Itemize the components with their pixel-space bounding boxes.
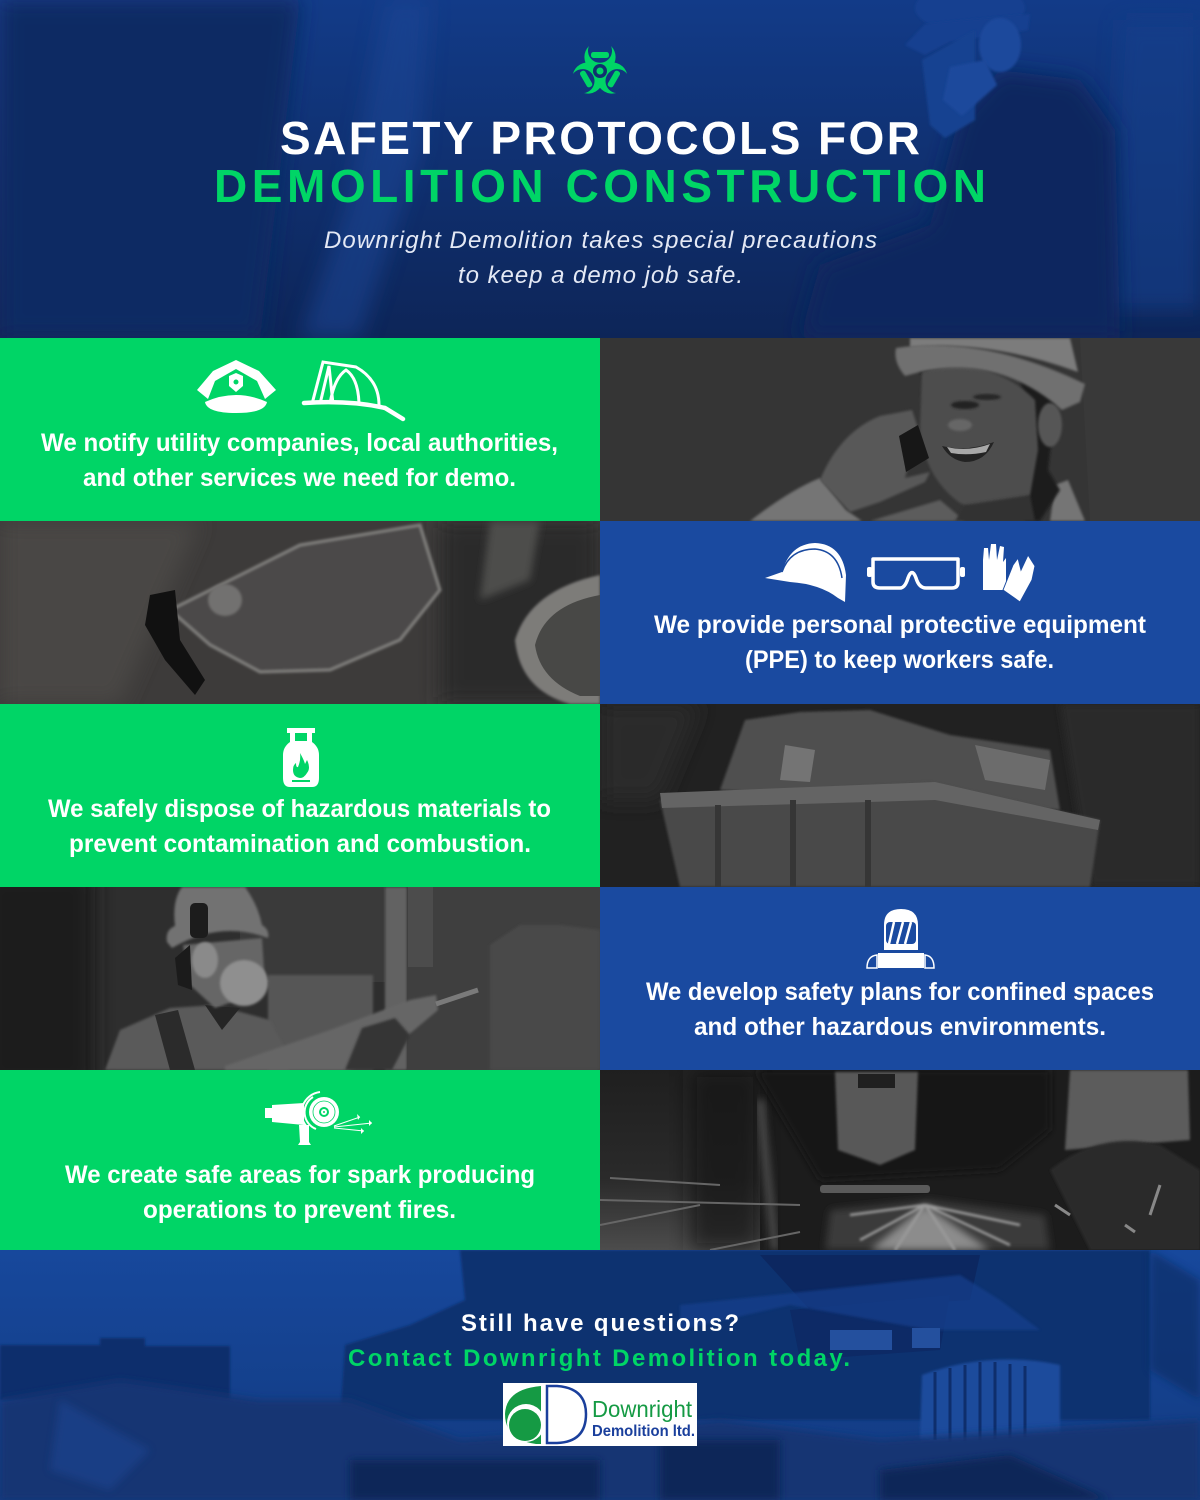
subtitle — [324, 227, 877, 289]
icon: biohazard — [571, 46, 629, 97]
hard hat — [167, 887, 268, 948]
icon: gas cylinder — [283, 728, 319, 787]
collapsed building — [340, 1250, 1150, 1420]
text: and other services we need for demo. — [83, 464, 516, 492]
logo: Downright Demolition: Demolition ltd. — [592, 1423, 695, 1440]
icon: hard hat — [765, 543, 846, 602]
icon: police cap — [197, 360, 276, 413]
icon: safety goggles — [867, 559, 965, 588]
text — [65, 1161, 535, 1224]
face — [920, 367, 1038, 510]
subtitle: Downright Demolition takes special precautions — [324, 227, 877, 254]
logo: Downright Demolition — [503, 1383, 697, 1446]
panel: hazardous materials — [0, 704, 600, 887]
hard hat — [895, 345, 1085, 410]
text: and other hazardous environments. — [694, 1013, 1106, 1041]
footer panel with blue-tinted demolition photo — [0, 1250, 1200, 1500]
photo: debris dumpster — [600, 704, 1200, 887]
text — [48, 795, 551, 858]
photo: worker with jackhammer — [0, 887, 600, 1070]
header panel with blue-tinted worker photo — [0, 0, 1200, 338]
excavator grille — [920, 1358, 1061, 1438]
head — [183, 938, 265, 1008]
text: We develop safety plans for confined spaces — [646, 978, 1154, 1006]
shirt — [750, 478, 862, 521]
icon: gloves — [983, 544, 1035, 602]
title: DEMOLITION CONSTRUCTION — [214, 160, 986, 212]
text: We safely dispose of hazardous materials to — [48, 795, 551, 823]
worker body — [926, 66, 1124, 308]
rubble — [0, 1380, 1200, 1500]
text: We provide personal protective equipment — [654, 611, 1147, 639]
photo: goggles and respirator — [0, 521, 600, 704]
icon: angle grinder — [265, 1092, 372, 1145]
title — [214, 112, 986, 212]
photo: worker on phone — [600, 338, 1200, 521]
panel: notify utilities — [0, 338, 600, 521]
text — [646, 978, 1154, 1041]
panel: protective equipment — [600, 521, 1200, 704]
hand and phone — [820, 410, 930, 512]
text: operations to prevent fires. — [143, 1196, 456, 1224]
icon: protective suit — [867, 909, 934, 968]
logo: Downright Demolition: Downright — [592, 1396, 693, 1422]
subtitle: to keep a demo job safe. — [458, 262, 743, 289]
shirt — [104, 1004, 270, 1070]
text — [654, 611, 1147, 674]
panel: confined spaces — [600, 887, 1200, 1070]
closing call to action: Still have questions? — [461, 1310, 739, 1337]
text — [41, 429, 558, 492]
text: prevent contamination and combustion. — [69, 830, 531, 858]
icon: firefighter helmet — [304, 362, 403, 419]
panel: spark producing operations — [0, 1070, 600, 1250]
text: (PPE) to keep workers safe. — [745, 646, 1054, 674]
photo: grinder sparks — [600, 1070, 1200, 1250]
hair — [919, 372, 1062, 521]
left building — [0, 1338, 230, 1400]
text: We create safe areas for spark producing — [65, 1161, 535, 1189]
closing call to action — [348, 1310, 850, 1372]
title: SAFETY PROTOCOLS FOR — [280, 112, 920, 164]
closing call to action: Contact Downright Demolition today. — [348, 1345, 850, 1372]
jackhammer — [225, 995, 438, 1070]
text: We notify utility companies, local authorities, — [41, 429, 558, 457]
